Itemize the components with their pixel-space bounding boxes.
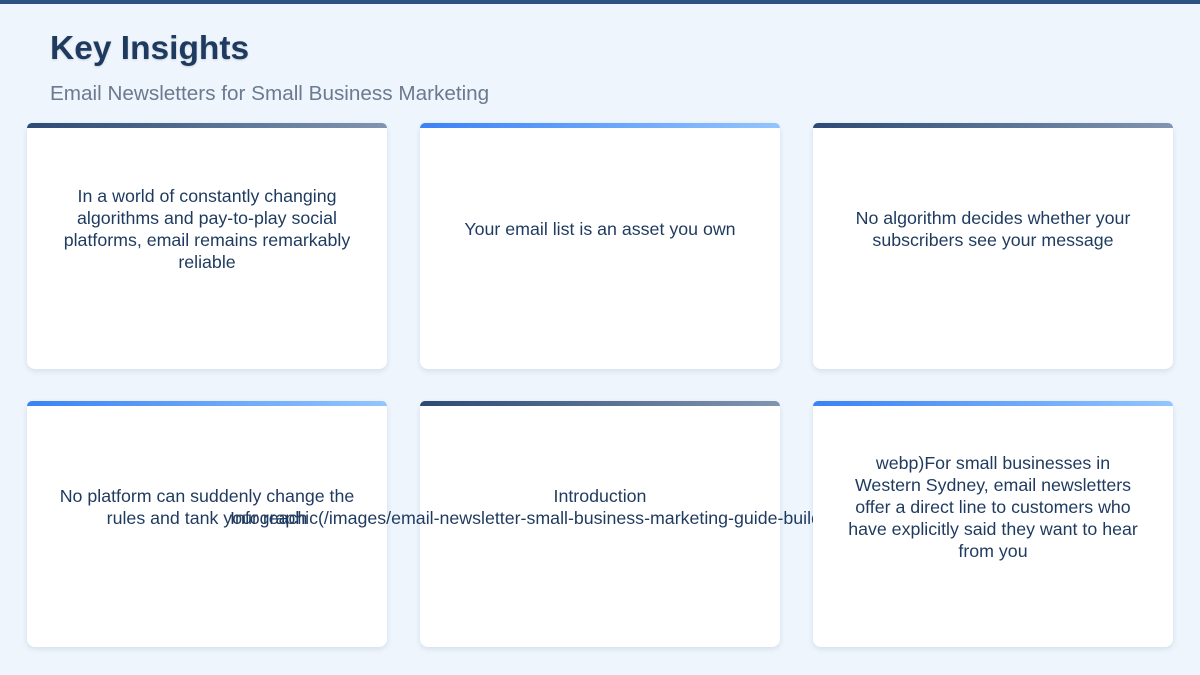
card 2: Your email list is an asset you own	[464, 219, 736, 239]
subtitle: Email Newsletters for Small Business Marketing	[50, 82, 489, 105]
card 4	[27, 401, 387, 647]
card 2	[420, 123, 780, 369]
card 6	[813, 401, 1173, 647]
card 5: Introduction	[554, 486, 646, 506]
card 3	[813, 123, 1173, 369]
card 4: No platform can suddenly change the rules and tank your reach	[60, 486, 354, 528]
card 3: No algorithm decides whether your subscribers see your message	[856, 208, 1130, 250]
card 5	[420, 401, 780, 647]
card 5: Infographic(/images/email-newsletter-small-business-marketing-guide-building-infographic.	[230, 508, 943, 528]
card 1: In a world of constantly changing algorithms and pay-to-play social platforms, email remains remarkably reliable	[64, 186, 350, 272]
card 6: webp)For small businesses in Western Sydney, email newsletters offer a direct line to customers who have explicitly said they want to hear from you	[848, 453, 1138, 561]
title: Key Insights	[50, 30, 249, 67]
card 1	[27, 123, 387, 369]
